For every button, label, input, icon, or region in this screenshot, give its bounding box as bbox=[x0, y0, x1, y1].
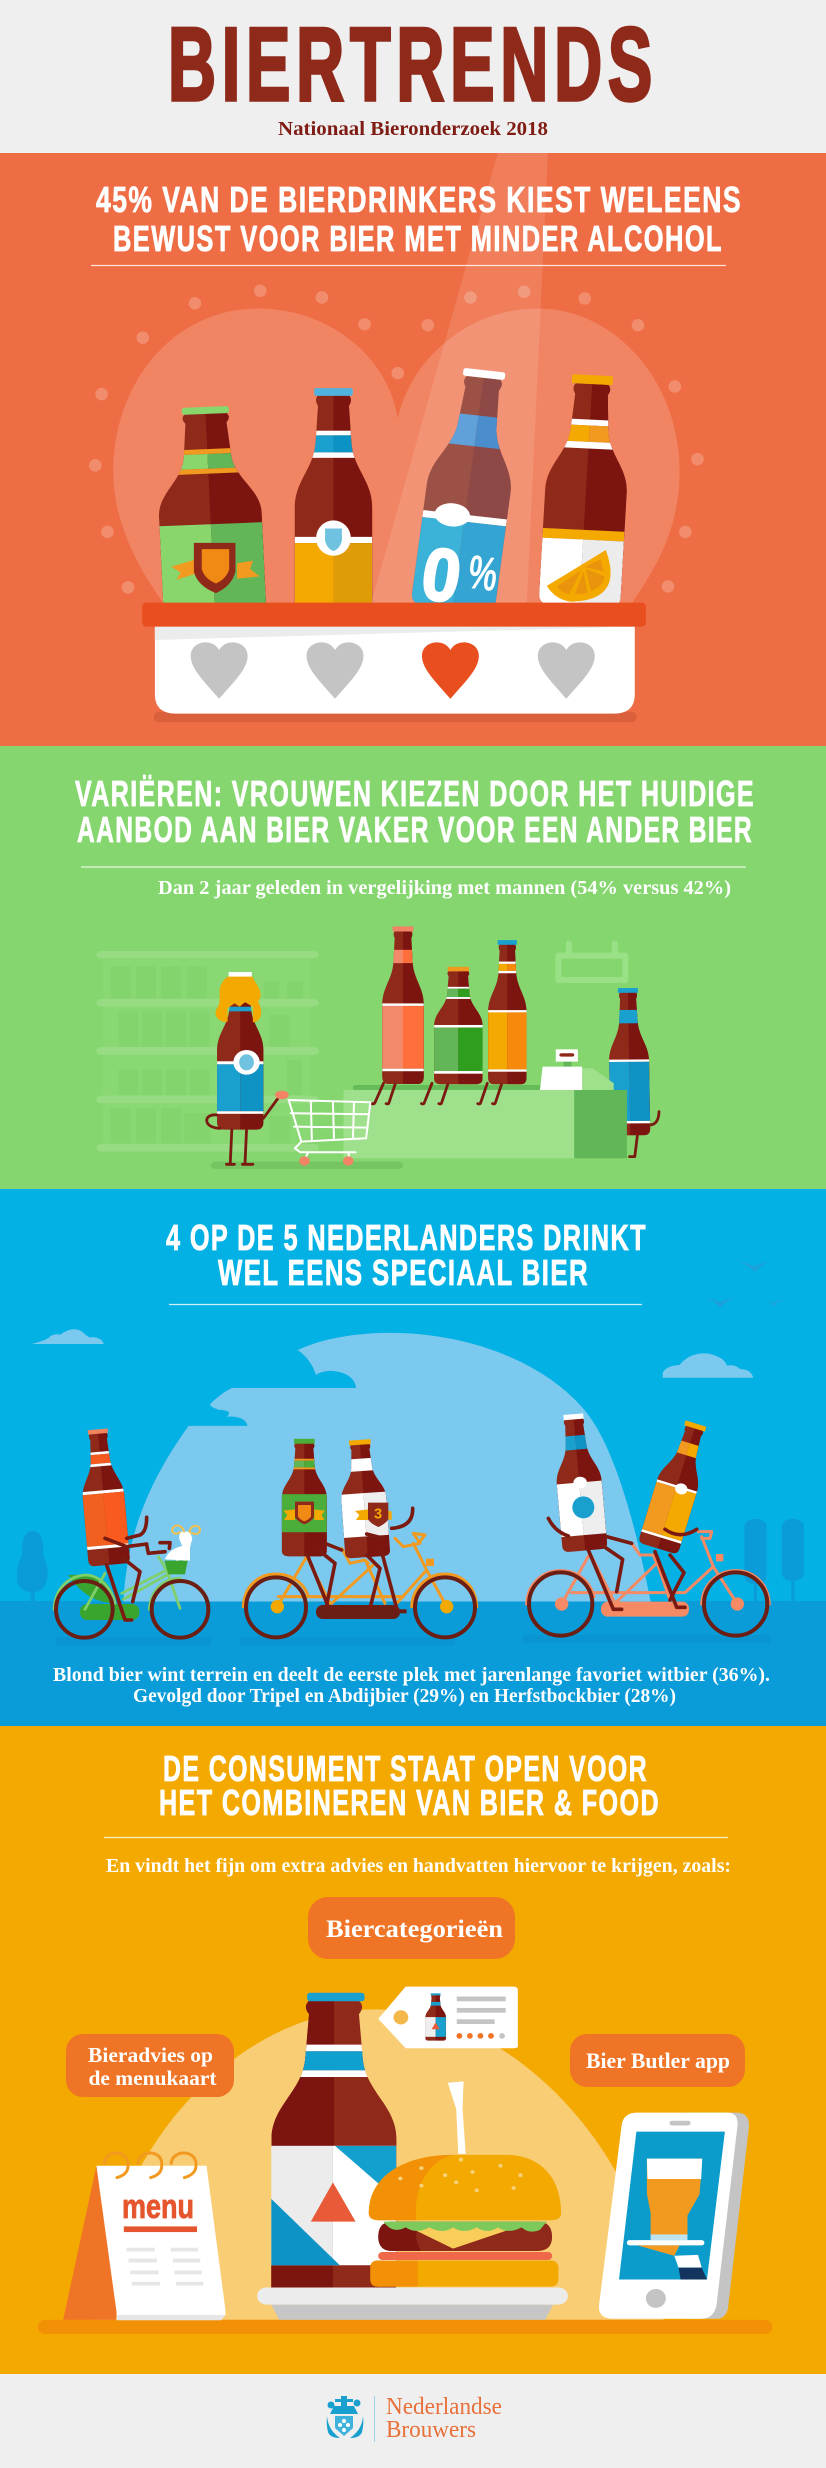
bottle on counter: green bbox=[434, 966, 483, 1084]
tag bbox=[378, 1987, 518, 2048]
subheading: En vindt het fijn om extra advies en handvatten hiervoor te krijgen, zoals: bbox=[106, 1856, 731, 1877]
callout: bieradvies op de menukaart: de menukaart bbox=[88, 2066, 217, 2090]
shopping cart bbox=[289, 1100, 370, 1166]
fork bbox=[448, 2081, 466, 2154]
emblem: round brewers seal bbox=[316, 520, 351, 556]
cloud left bbox=[32, 1329, 104, 1344]
floor shadow bbox=[211, 1162, 403, 1169]
label text: 0%: 0 bbox=[416, 531, 467, 619]
ground bar bbox=[38, 2320, 772, 2334]
icon: grey heart bbox=[191, 642, 248, 699]
character: cashier bottle bbox=[604, 988, 659, 1157]
illustration: supermarket scene bbox=[96, 926, 659, 1169]
label text: menu: menu bbox=[122, 2188, 194, 2226]
trees bbox=[17, 1519, 804, 1603]
bottle rider: white bbox=[556, 1413, 608, 1552]
callout: bier butler app: Bier Butler app bbox=[586, 2048, 730, 2073]
icon: red heart bbox=[422, 642, 479, 699]
bike: green with goat bbox=[54, 1427, 208, 1638]
light beam bbox=[371, 153, 548, 603]
text: blond bier: Blond bier wint terrein en deelt de eerste plek met jarenlange favoriet witbier (36%). bbox=[53, 1664, 770, 1686]
bike: orange tandem bbox=[243, 1438, 477, 1637]
emblem: shield with ribbon bbox=[171, 543, 260, 593]
bottle rider: orange bbox=[82, 1428, 130, 1566]
panel: speciaal bier bbox=[0, 1189, 826, 1726]
bike: salmon tandem bbox=[527, 1412, 769, 1636]
callout: bieradvies op de menukaart bbox=[66, 2034, 234, 2097]
logo: Nederlandse Brouwers emblem bbox=[327, 2396, 363, 2438]
panel: minder alcohol bbox=[0, 153, 826, 746]
illustration: landscape bbox=[17, 1261, 804, 1603]
bottle: citrus bbox=[539, 374, 627, 603]
icon: orange slice bbox=[547, 550, 611, 602]
logo text: Brouwers bbox=[386, 2417, 476, 2443]
icon: grey heart bbox=[538, 642, 595, 699]
callout: biercategorieen: Biercategorieën bbox=[326, 1916, 503, 1943]
big bottle bbox=[271, 1992, 396, 2288]
text: blond bier bbox=[53, 1664, 770, 1707]
subtitle: Nationaal Bieronderzoek 2018 bbox=[278, 118, 548, 140]
crate bbox=[142, 603, 646, 722]
bottle rider: orange leaning bbox=[639, 1420, 706, 1554]
heading: minder alcohol bbox=[96, 179, 742, 259]
hill with cloud cut-outs bbox=[123, 1333, 651, 1602]
shelves bbox=[96, 951, 319, 1152]
plate bbox=[257, 2288, 568, 2320]
heart background bbox=[113, 309, 680, 603]
callout: biercategorieen bbox=[308, 1897, 515, 1959]
bottle rider: green bbox=[282, 1438, 327, 1556]
text: blond bier: Gevolgd door Tripel en Abdijbier (29%) en Herfstbockbier (28%) bbox=[133, 1685, 676, 1707]
bottle on counter: orange bbox=[488, 940, 527, 1084]
heading: speciaal bier bbox=[166, 1217, 647, 1293]
icon: grey heart bbox=[307, 642, 363, 699]
bottle rider: white tripel bbox=[341, 1439, 390, 1558]
bottle: alcohol free 0% bbox=[412, 368, 511, 603]
goat in basket bbox=[164, 1525, 200, 1574]
label text: 0%: % bbox=[465, 544, 502, 602]
panel: header bbox=[0, 0, 826, 153]
subheading: Dan 2 jaar geleden in vergelijking met mannen (54% versus 42%) bbox=[158, 877, 731, 899]
cash register bbox=[540, 1049, 582, 1090]
background arc bbox=[95, 2009, 664, 2322]
label text: 0% bbox=[416, 531, 503, 623]
panel: bier en food bbox=[0, 1726, 826, 2374]
illustration: bottles in heart crate bbox=[89, 153, 704, 722]
callout: bieradvies op de menukaart: Bieradvies op bbox=[88, 2043, 213, 2067]
confetti dots bbox=[89, 285, 704, 594]
illustration: beer and burger bbox=[38, 1987, 772, 2334]
checkout counter bbox=[343, 1049, 627, 1158]
bottle: green bbox=[159, 406, 266, 603]
bottle on counter: salmon bbox=[382, 926, 424, 1084]
panel: varieren bbox=[0, 746, 826, 1190]
birds bbox=[703, 1261, 784, 1308]
heading: bier en food bbox=[159, 1748, 660, 1823]
bottle: blue bbox=[294, 388, 372, 603]
panel: footer bbox=[0, 2374, 826, 2468]
label text: 3: 3 bbox=[374, 1506, 382, 1522]
logo text bbox=[386, 2394, 502, 2443]
heading: speciaal bier: WEL EENS SPECIAAL BIER bbox=[218, 1252, 589, 1293]
cloud right bbox=[663, 1353, 753, 1378]
sign bbox=[558, 943, 625, 980]
heading: varieren bbox=[75, 773, 755, 850]
burger bbox=[369, 2155, 561, 2287]
callout: bier butler app bbox=[570, 2034, 745, 2087]
mini bottle bbox=[425, 1993, 446, 2041]
menu card bbox=[63, 2153, 225, 2320]
logo text: Nederlandse bbox=[386, 2394, 502, 2420]
character: shopping bottle bbox=[207, 972, 289, 1164]
road shadows bbox=[56, 1635, 770, 1645]
phone bbox=[599, 2113, 749, 2319]
dangling legs bbox=[372, 1083, 502, 1104]
